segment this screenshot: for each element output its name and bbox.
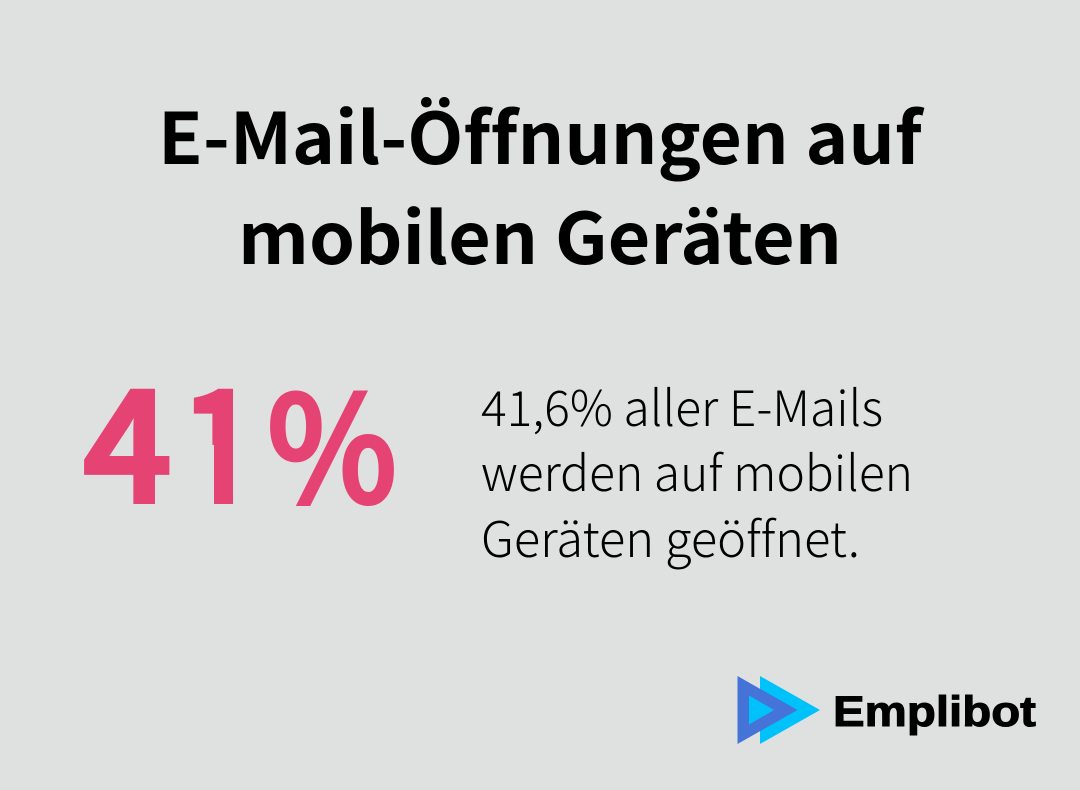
description text: werden auf mobilen xyxy=(481,435,913,506)
logo wordmark: Emplibot xyxy=(833,688,1036,736)
big statistic: 41% xyxy=(84,388,394,506)
big statistic: 41%: % xyxy=(267,334,397,545)
title: mobilen Geräten xyxy=(238,183,842,285)
logo: Emplibot xyxy=(738,676,1036,744)
title xyxy=(158,83,925,285)
title: E-Mail-Öffnungen auf xyxy=(158,83,925,185)
description text xyxy=(481,370,913,572)
description text: Geräten geöffnet. xyxy=(481,501,860,572)
big statistic: 41%: 4 xyxy=(84,324,172,546)
icon: play triangles xyxy=(738,676,820,744)
description text: 41,6% aller E-Mails xyxy=(481,370,883,441)
infographic canvas xyxy=(84,97,1036,744)
big statistic: 41%: 1 xyxy=(180,324,260,546)
